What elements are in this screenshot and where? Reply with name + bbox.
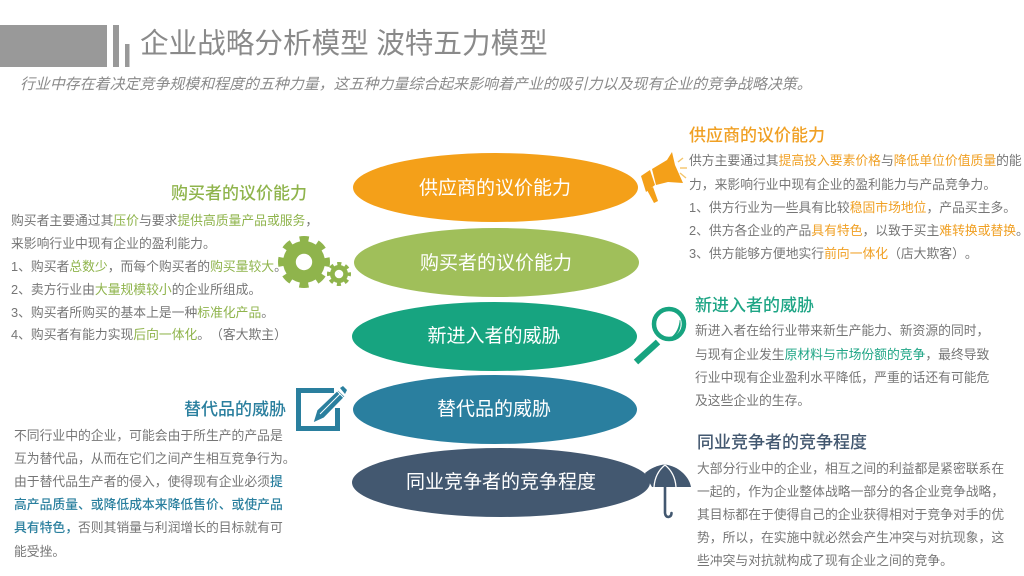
title: 企业战略分析模型 波特五力模型 xyxy=(140,28,548,60)
ellipse label: rivalry: 同业竞争者的竞争程度 xyxy=(406,472,596,493)
text: substitutes details xyxy=(14,428,296,559)
text: substitutes details: 互为替代品，从而在它们之间产生相互竞争行为。 xyxy=(14,451,296,466)
text: substitutes details: 具有特色，否则其销量与利润增长的目标就有可 xyxy=(14,520,283,535)
text: new entrants details: 行业中现有企业盈利水平降低，严重的话还有可能危 xyxy=(695,370,989,385)
subtitle: 行业中存在着决定竞争规模和程度的五种力量，这五种力量综合起来影响着产业的吸引力以及现有企业的竞争战略决策。 xyxy=(20,76,812,93)
heading: substitutes: 替代品的威胁 xyxy=(184,400,286,419)
ellipse label: buyer: 购买者的议价能力 xyxy=(420,253,572,274)
icon: gears xyxy=(278,236,351,288)
text: supplier details: 3、供方能够方便地实行前向一体化（店大欺客）。 xyxy=(689,246,978,261)
icon: megaphone xyxy=(641,152,687,203)
text: buyer details: 1、购买者总数少，而每个购买者的购买量较大。 xyxy=(11,259,287,274)
heading: rivalry: 同业竞争者的竞争程度 xyxy=(697,433,867,452)
heading: new entrants: 新进入者的威胁 xyxy=(695,296,814,315)
text: new entrants details: 与现有企业发生原材料与市场份额的竞争，最终导致 xyxy=(695,347,989,362)
text: rivalry details: 一起的，作为企业整体战略一部分的各企业竞争战略， xyxy=(697,484,1004,499)
text: buyer details: 2、卖方行业由大量规模较小的企业所组成。 xyxy=(11,282,261,297)
text: buyer details: 来影响行业中现有企业的盈利能力。 xyxy=(11,236,216,251)
panel: new entrants threat xyxy=(695,296,989,408)
ellipse label: substitutes: 替代品的威胁 xyxy=(437,399,551,420)
heading: buyer: 购买者的议价能力 xyxy=(171,184,307,203)
text: buyer details: 购买者主要通过其压价与要求提供高质量产品或服务， xyxy=(11,213,318,228)
text: rivalry details: 其目标都在于使得自己的企业获得相对于竞争对手的优 xyxy=(697,507,1004,522)
text: substitutes details: 能受挫。 xyxy=(14,544,65,559)
text: new entrants details: 新进入者在给行业带来新生产能力、新资源的同时， xyxy=(695,323,989,338)
text: substitutes details: 由于替代品生产者的侵入，使得现有企业必须提 xyxy=(14,474,283,489)
text: supplier details: 2、供方各企业的产品具有特色，以致于买主难转换或替换。 xyxy=(689,223,1024,238)
panel: buyer bargaining power xyxy=(11,184,318,342)
icon: umbrella xyxy=(645,464,691,518)
text: supplier details: 供方主要通过其提高投入要素价格与降低单位价值质量的能 xyxy=(689,153,1022,168)
text: rivalry details: 势，所以，在实施中就必然会产生冲突与对抗现象，这 xyxy=(697,530,1004,545)
text: rivalry details xyxy=(697,461,1004,568)
text: buyer details: 4、购买者有能力实现后向一体化。（客大欺主） xyxy=(11,327,287,342)
text: rivalry details: 大部分行业中的企业，相互之间的利益都是紧密联系在 xyxy=(697,461,1004,476)
ellipse label: supplier: 供应商的议价能力 xyxy=(419,178,571,199)
panel: substitutes threat xyxy=(14,400,296,559)
text: supplier details: 1、供方行业为一些具有比较稳固市场地位，产品买主多。 xyxy=(689,200,1016,215)
panel: supplier bargaining power xyxy=(689,126,1024,261)
five forces ellipses xyxy=(352,153,650,517)
heading: supplier: 供应商的议价能力 xyxy=(689,126,825,145)
text: supplier details: 力，来影响行业中现有企业的盈利能力与产品竞争力。 xyxy=(689,177,996,192)
icon: magnifier xyxy=(634,306,686,364)
icon: pencil and box xyxy=(296,386,347,431)
panel: industry rivalry xyxy=(697,433,1004,568)
text: rivalry details: 些冲突与对抗就构成了现有企业之间的竞争。 xyxy=(697,553,953,568)
text: new entrants details xyxy=(695,323,989,408)
text: buyer details: 3、购买者所购买的基本上是一种标准化产品。 xyxy=(11,305,274,320)
text: buyer details xyxy=(11,213,318,342)
text: substitutes details: 不同行业中的企业，可能会由于所生产的产品是 xyxy=(14,428,283,443)
ellipse label: new entrants: 新进入者的威胁 xyxy=(427,326,560,347)
text: new entrants details: 及这些企业的生存。 xyxy=(695,393,810,408)
header bar decoration xyxy=(0,25,130,67)
text: substitutes details: 高产品质量、或降低成本来降低售价、或使产品 xyxy=(14,497,283,512)
text: supplier details xyxy=(689,153,1024,261)
